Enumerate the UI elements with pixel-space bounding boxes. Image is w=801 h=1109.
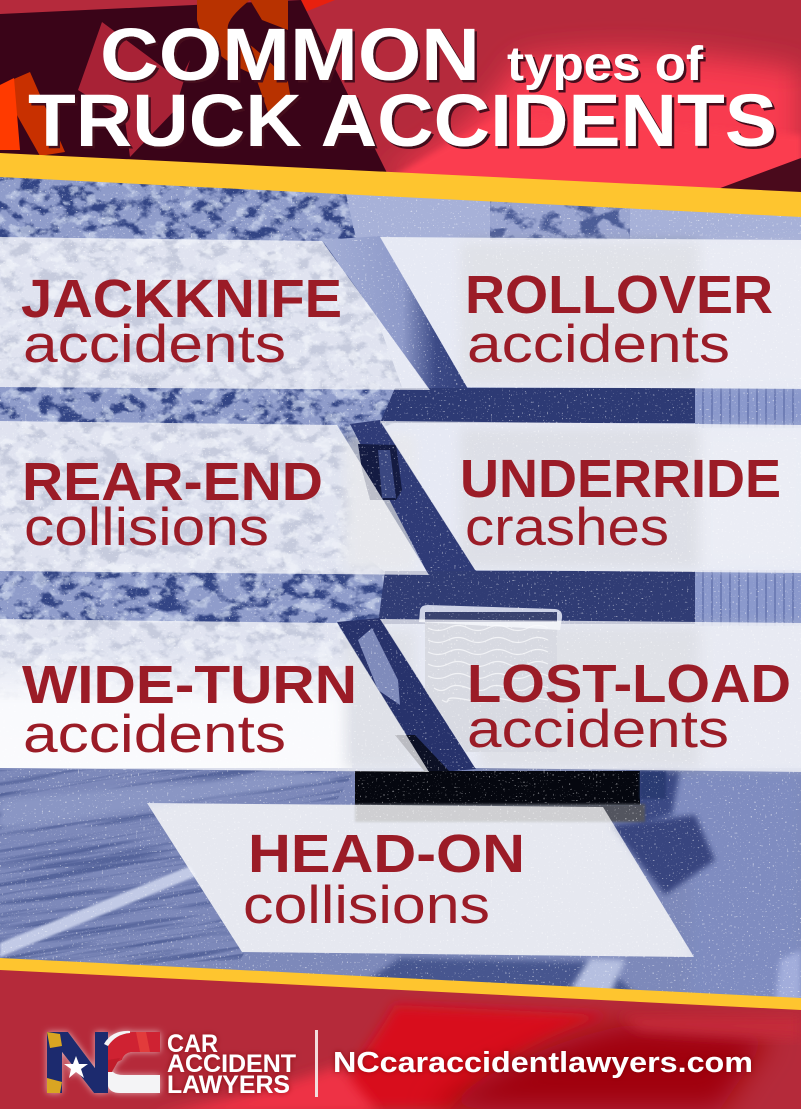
title: types of xyxy=(507,38,704,91)
yellow band: top xyxy=(0,153,801,217)
footer red flag background xyxy=(0,970,801,1109)
panel: wide-turn accidents xyxy=(0,619,429,772)
panel: lost-load accidents: LOST-LOAD xyxy=(467,654,791,714)
truck cab xyxy=(322,236,801,822)
snowy bank xyxy=(0,650,352,770)
panel: lost-load accidents: accidents xyxy=(467,700,729,759)
road xyxy=(0,768,801,998)
trailer xyxy=(695,388,801,626)
panel: rollover accidents: accidents xyxy=(467,315,730,374)
title: COMMON xyxy=(100,13,480,96)
panel: jackknife accidents: JACKKNIFE xyxy=(21,269,342,329)
panel: jackknife accidents xyxy=(0,237,430,390)
cab and trailer tones under panels, softened xyxy=(345,242,801,768)
bumper and wheels xyxy=(355,771,640,805)
logo text: LAWYERS xyxy=(167,1071,290,1099)
panel: lost-load accidents xyxy=(380,619,801,772)
mirror xyxy=(358,444,402,500)
yellow band: bottom xyxy=(0,958,801,1022)
photo background: truck in snow xyxy=(0,177,801,998)
gaps between panels xyxy=(322,236,468,391)
panel: rear-end collisions: REAR-END xyxy=(22,452,323,512)
grille xyxy=(425,622,557,752)
panel: underride crashes: crashes xyxy=(465,498,669,557)
logo text: ACCIDENT xyxy=(167,1050,296,1078)
snow flecks xyxy=(0,170,801,1000)
icon: NC logo xyxy=(47,1031,160,1093)
divider xyxy=(315,1030,318,1097)
panel: rear-end collisions xyxy=(0,421,429,575)
top red flag background xyxy=(0,0,801,210)
panel: rear-end collisions: collisions xyxy=(24,498,269,557)
panel: head-on collisions: HEAD-ON xyxy=(248,824,525,884)
panel: head-on collisions: collisions xyxy=(243,876,490,935)
title xyxy=(28,13,777,162)
panel: wide-turn accidents: accidents xyxy=(23,705,286,764)
panel: head-on collisions xyxy=(147,803,694,957)
trees on the left xyxy=(0,170,420,700)
panel: jackknife accidents: accidents xyxy=(23,315,286,374)
website url: NCcaraccidentlawyers.com xyxy=(333,1047,753,1079)
logo text: CAR xyxy=(167,1030,218,1058)
panel: wide-turn accidents: WIDE-TURN xyxy=(22,655,357,715)
distant trees xyxy=(490,201,630,240)
panel: rollover accidents: ROLLOVER xyxy=(465,265,773,325)
title: TRUCK ACCIDENTS xyxy=(28,79,777,162)
panel: underride crashes: UNDERRIDE xyxy=(460,449,781,509)
logo text xyxy=(167,1030,296,1099)
panel: rollover accidents xyxy=(380,237,801,389)
panel: underride crashes xyxy=(380,421,801,573)
